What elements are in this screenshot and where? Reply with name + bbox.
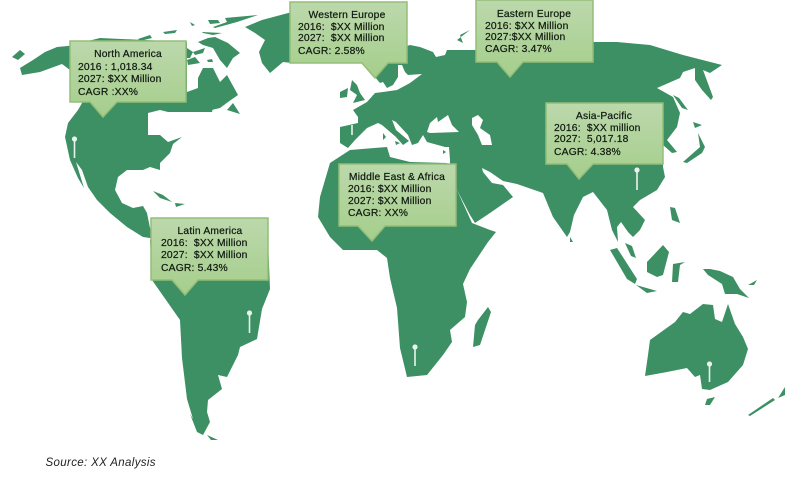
callout: Middle East and Africa: 2016: $XX Million [348,184,432,195]
callout: North America: North America [94,49,162,60]
landmass: British Isles [340,80,365,103]
landmass: Africa [318,147,496,377]
landmass: Australia [645,304,748,390]
landmass: Eurasia [340,30,722,242]
callout: Eastern Europe: Eastern Europe [497,9,571,20]
callout: Latin America: CAGR: 5.43% [161,263,228,274]
callout: Middle East and Africa: CAGR: XX% [348,208,408,219]
landmass: North America [20,38,238,240]
callout: Latin America: 2027: $XX Million [161,250,248,261]
callout: Latin America: 2016: $XX Million [161,238,248,249]
callout: North America: 2016 : 1,018.34 [78,62,153,73]
callout: Eastern Europe: 2016: $XX Million [485,21,569,32]
callout: Middle East and Africa [339,164,456,241]
callout: Latin America [151,218,268,295]
callout: Middle East and Africa: 2027: $XX Million [348,196,432,207]
callout: North America: CAGR :XX% [78,87,138,98]
location pins [73,125,711,382]
callout: Latin America: Latin America [178,226,243,237]
pin: Western Europe [351,125,353,135]
pin: Middle East and Africa [413,345,417,366]
pin: Australia [708,362,711,382]
callout: Asia-Pacific: CAGR: 4.38% [554,147,621,158]
callout: Asia-Pacific: 2016: $XX million [554,123,641,134]
landmass: South America [150,225,270,440]
callout: Middle East and Africa: Middle East & Africa [349,172,445,183]
callout: Asia-Pacific [546,103,663,179]
callout: Eastern Europe: 2027:$XX Million [485,32,566,43]
callout: Western Europe: Western Europe [308,10,386,21]
pin: North America [73,137,76,158]
callout: Western Europe [290,2,407,78]
callout: Western Europe: 2027: $XX Million [298,33,385,44]
callout: Eastern Europe: CAGR: 3.47% [485,44,552,55]
pin: Latin America [248,311,251,333]
callout: Asia-Pacific: 2027: 5,017.18 [554,134,629,145]
Asia-Pacific islands [383,30,785,416]
landmass: Greenland [245,12,292,73]
Arctic and Caribbean islands [12,15,258,207]
callout: North America [70,41,186,117]
callout: Eastern Europe [476,0,593,77]
callout: North America: 2027: $XX Million [78,74,162,85]
pin: Asia-Pacific [635,168,639,190]
source note: Source: XX Analysis [46,457,156,469]
callout: Asia-Pacific: Asia-Pacific [576,111,632,122]
callout: Western Europe: 2016: $XX Million [298,22,385,33]
callout: Western Europe: CAGR: 2.58% [298,46,365,57]
